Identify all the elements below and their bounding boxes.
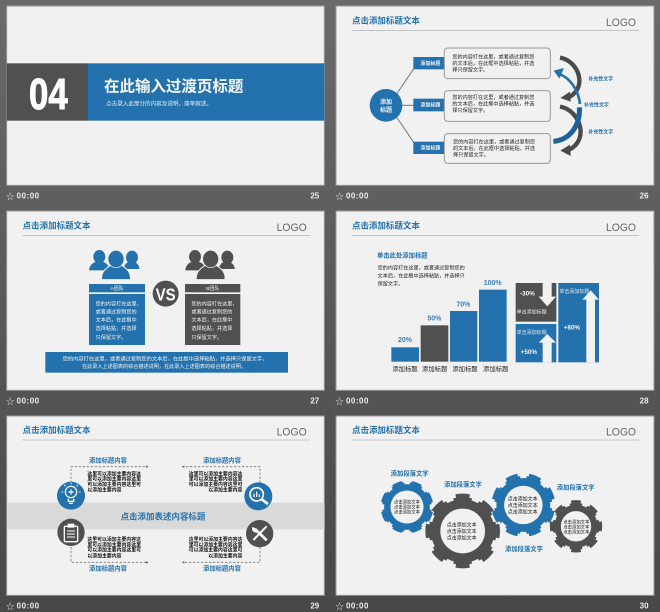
gear labels: 添加段落文字	[557, 483, 595, 492]
footer: time and page number: 29	[310, 601, 320, 610]
panel: slide 27 team comparison	[6, 211, 324, 406]
team A card: 文本后，在此框中	[96, 316, 137, 324]
footer: time and page number	[6, 191, 320, 201]
central circle: 标题	[380, 106, 392, 114]
bar chart	[391, 280, 509, 373]
tile: +50%: 单击添加标题	[517, 329, 547, 336]
team B card: B团队	[206, 285, 219, 292]
top-left text	[87, 456, 141, 493]
footer: time and page number: ☆	[335, 601, 344, 611]
bar chart: 添加标题	[483, 364, 509, 373]
heading	[352, 425, 639, 440]
heading: 点击添加标题文本	[352, 220, 420, 230]
gear captions: 点击添加文本	[508, 508, 538, 515]
icon: clipboard	[57, 519, 85, 546]
VS badge	[153, 281, 179, 307]
bottom-left text: 这里可以添加主要内容这	[87, 536, 141, 543]
gear captions: 点击添加文本	[563, 518, 590, 525]
bar chart: 添加标题	[452, 364, 478, 373]
team B card	[185, 284, 240, 345]
gear captions: 点击添加文本	[394, 498, 421, 505]
branch 3: 的文本后，在此框中选择粘贴，并选	[453, 144, 535, 152]
heading: LOGO	[277, 222, 307, 234]
team A card: 或者通过复制您的	[96, 307, 137, 315]
section number block: 04	[29, 70, 68, 119]
footer: time and page number: 27	[310, 396, 320, 405]
arrow captions: 补充性文字	[588, 75, 613, 82]
bar chart: 添加标题	[422, 364, 448, 373]
branch 2: 添加标题	[420, 102, 440, 109]
team A card: 选择粘贴，并选择	[96, 324, 137, 332]
bar chart: 添加标题	[392, 364, 418, 373]
top-left text: 可以添加主要内容这里可	[87, 481, 141, 488]
top-right text: 添加标题内容	[203, 456, 242, 465]
bottom-right text: 里可以添加主要内容这里	[189, 541, 242, 548]
heading: LOGO	[606, 222, 636, 234]
footer: time and page number: 00:00	[346, 396, 369, 405]
summary band	[45, 352, 288, 373]
panel: slide 25 section divider	[6, 6, 324, 201]
gear captions: 点击添加文本	[508, 495, 538, 502]
gear: large gray	[429, 497, 497, 565]
gear labels	[391, 468, 595, 553]
footer: time and page number: 28	[640, 396, 649, 405]
bottom-right text: 添加标题内容	[203, 563, 242, 572]
footer: time and page number: 00:00	[346, 191, 369, 200]
heading: 点击添加标题文本	[23, 425, 91, 435]
tile: -30%	[516, 283, 556, 322]
bottom-left text	[87, 536, 141, 572]
footer: time and page number: 26	[640, 191, 649, 200]
top-left text: 以添加主要内容	[87, 486, 122, 493]
footer: time and page number: ☆	[335, 191, 344, 201]
panel: slide 26 hierarchy diagram	[335, 6, 654, 201]
branch 1: 择只保留文字。	[452, 65, 488, 73]
footer: time and page number	[335, 191, 649, 201]
top-right text: 可以添加主要内容这里可	[189, 481, 242, 488]
footer: time and page number: ☆	[335, 396, 344, 406]
top-right text	[189, 456, 242, 493]
bottom-right text	[189, 536, 242, 572]
bottom-left text: 可以添加主要内容这里可	[87, 547, 141, 554]
icon: team B people	[185, 250, 235, 280]
branch 1: 添加标题	[420, 60, 440, 67]
team A card: 您的内容打在这里，	[96, 299, 142, 307]
section title band: 在此输入过渡页标题	[104, 76, 244, 95]
bottom-left text: 里可以添加主要内容这里	[87, 541, 141, 548]
top-left text: 这里可以添加主要内容这	[87, 470, 141, 477]
curved arrows	[553, 58, 581, 156]
VS badge: VS	[156, 284, 176, 304]
gear captions: 点击添加文本	[447, 535, 477, 542]
central band	[7, 503, 324, 529]
tile: +80%: +80%	[564, 324, 580, 331]
bar chart: 70%	[456, 301, 471, 308]
branch 1: 您的内容打在这里，或者通过复制您	[452, 52, 534, 60]
central circle: 添加	[380, 98, 392, 106]
team B card: 选择粘贴，并选择	[191, 324, 232, 332]
top-right text: 这里可以添加主要内容这	[189, 470, 242, 477]
top-left text: 里可以添加主要内容这里	[87, 476, 141, 483]
panel: slide 30 gears	[335, 416, 654, 611]
connector lines	[397, 68, 414, 143]
intro text block: 文本后，在此框中选择粘贴，并选择只	[378, 271, 465, 279]
summary band: 在此录入上述图表的综合描述说明，在此录入上述图表的综合描述说明。	[82, 362, 246, 370]
footer: time and page number: 00:00	[17, 396, 40, 405]
tile: +50%	[516, 324, 556, 362]
summary band: 您的内容打在这里，或者通过复制您的文本后，在此框中选择粘贴，并选择只保留文字。	[63, 354, 267, 362]
branch 2	[413, 91, 550, 121]
gear captions: 点击添加文本	[394, 508, 421, 515]
footer: time and page number: ☆	[6, 601, 15, 611]
icon: team A people	[89, 250, 139, 280]
arrow captions: 补充性文字	[584, 102, 609, 109]
arrow captions: 补充性文字	[588, 128, 613, 135]
gear captions	[394, 495, 590, 542]
bottom-right text: 可以添加主要内容这里可	[189, 547, 242, 554]
branch 2: 您的内容打在这里，或者通过复制您	[452, 93, 534, 101]
tile: -30%: 单击添加标题	[517, 308, 547, 315]
section title band: 点击录入此部分的内容及说明，简单叙述。	[106, 99, 212, 107]
gear captions: 点击添加文本	[508, 502, 538, 509]
branch 3: 择只保留文字。	[453, 151, 489, 159]
bottom-left text: 以添加主要内容	[87, 552, 122, 559]
footer: time and page number: 00:00	[346, 601, 369, 610]
branch 3: 添加标题	[420, 144, 440, 151]
top-right text: 以添加主要内容	[208, 486, 242, 493]
footer: time and page number: 00:00	[17, 601, 40, 610]
gear labels: 添加段落文字	[505, 544, 543, 553]
icon: magnifier	[244, 482, 272, 510]
team A card: 只保留文字。	[96, 333, 126, 341]
bar chart: 100%	[484, 280, 502, 287]
branch 3	[413, 134, 550, 163]
intro text block: 您的内容打在这里，或者通过复制您的	[378, 263, 465, 271]
team B card: 只保留文字。	[191, 333, 222, 341]
footer: time and page number	[335, 601, 649, 611]
top-right text: 里可以添加主要内容这里	[189, 476, 242, 483]
bottom-left text: 添加标题内容	[89, 563, 128, 572]
heading	[22, 220, 310, 235]
connector arrow tips	[146, 465, 184, 564]
footer: time and page number	[6, 396, 320, 406]
section number block	[7, 63, 88, 121]
intro text block: 单击此处添加标题	[377, 250, 428, 259]
team A card	[89, 284, 145, 345]
section title band	[88, 63, 324, 121]
footer: time and page number: ☆	[6, 396, 15, 406]
heading: LOGO	[606, 427, 636, 439]
tile: +80%	[558, 283, 599, 362]
footer: time and page number: 00:00	[17, 191, 40, 200]
gear captions: 点击添加文本	[563, 523, 590, 530]
intro text block	[377, 250, 465, 288]
team B card: 文本后，在此框中	[191, 316, 232, 324]
dashed connectors	[71, 467, 260, 562]
branch 2: 的文本后，在此框中选择粘贴，并选	[452, 100, 534, 108]
intro text block: 保留文字。	[378, 280, 403, 288]
team B card: 您的内容打在这里，	[191, 299, 237, 307]
gear captions: 点击添加文本	[563, 529, 590, 536]
branch 1: 的文本后，在此框中选择粘贴，并选	[452, 59, 534, 67]
tile: +50%: +50%	[521, 349, 537, 356]
gear: large blue	[485, 467, 561, 543]
gear captions: 点击添加文本	[447, 528, 477, 535]
branch 2: 择只保留文字。	[452, 106, 488, 114]
heading	[352, 220, 639, 235]
heading: 点击添加标题文本	[352, 425, 420, 435]
gear: small blue	[375, 475, 439, 539]
footer: time and page number	[335, 396, 649, 406]
heading: 点击添加标题文本	[23, 220, 91, 230]
heading	[352, 15, 639, 30]
gear: small gray	[552, 503, 600, 550]
gear labels: 添加段落文字	[391, 468, 429, 477]
panel: slide 28 bars and percent tiles	[335, 211, 654, 406]
icon: light bulb	[57, 482, 85, 510]
footer: time and page number	[6, 601, 320, 611]
heading	[22, 425, 310, 440]
gear labels: 添加段落文字	[444, 479, 482, 488]
central band: 点击添加表述内容标题	[121, 511, 206, 521]
footer: time and page number: ☆	[6, 191, 15, 201]
heading: LOGO	[277, 427, 307, 439]
bottom-right text: 以添加主要内容	[208, 552, 242, 559]
tile: -30%: -30%	[520, 290, 535, 297]
footer: time and page number: 30	[640, 601, 649, 610]
footer: time and page number: 25	[310, 191, 320, 200]
heading: LOGO	[606, 17, 636, 29]
team A card: A团队	[110, 285, 124, 292]
tile: +80%: 单击添加标题	[559, 288, 589, 295]
heading: 点击添加标题文本	[352, 15, 420, 25]
bar chart: 50%	[427, 316, 442, 323]
bar chart: 20%	[398, 337, 413, 344]
icon: wrench and screwdriver	[246, 520, 273, 547]
team B card: 或者通过复制您的	[191, 307, 232, 315]
gear captions: 点击添加文本	[447, 522, 477, 529]
gear captions: 点击添加文本	[394, 503, 421, 510]
panel: slide 29 four-point diagram	[6, 416, 324, 611]
branch 3: 您的内容打在这里，或者通过复制您	[453, 137, 535, 145]
bottom-right text: 这里可以添加主要内容这	[189, 536, 242, 543]
top-left text: 添加标题内容	[89, 456, 128, 465]
arrow captions	[584, 75, 613, 135]
central circle	[370, 89, 402, 122]
branch 1	[413, 48, 550, 79]
